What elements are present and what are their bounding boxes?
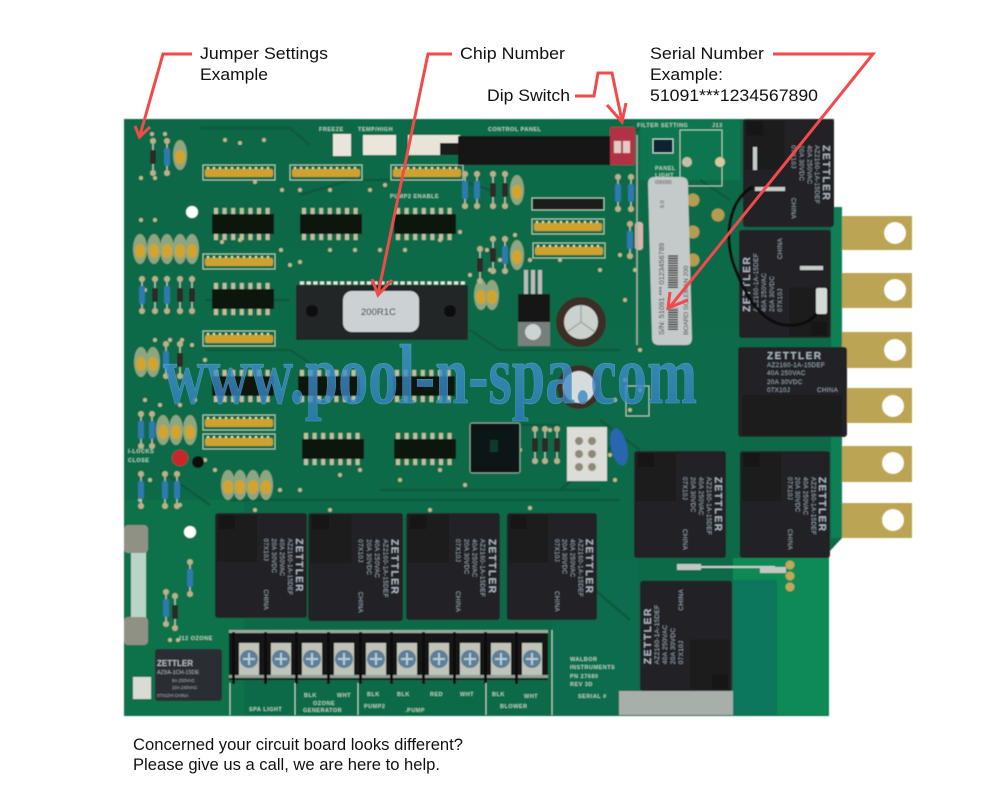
relay bottom 2: 07X10J (357, 539, 364, 563)
discrete resistors and diodes (138, 138, 634, 631)
arrow: jumper settings (135, 54, 192, 137)
gold pads by relay (786, 565, 794, 587)
serial number sticker: 6.0 (660, 200, 666, 208)
label: serial number: Serial Number (650, 44, 764, 63)
silkscreen labels: BLK (367, 692, 380, 698)
relay horizontal: 07X10J (767, 387, 790, 394)
silkscreen labels: GENERATOR (303, 708, 342, 714)
ozone relay (155, 649, 222, 701)
relay second right (739, 230, 831, 338)
relay middle left: 20A 30VDC (689, 477, 696, 513)
relay bottom 4: CHINA (553, 591, 560, 613)
label: serial number (650, 44, 818, 105)
silkscreen labels: FILTER SETTING (637, 123, 688, 129)
relay bottom 3: ZETTLER (486, 539, 497, 594)
silkscreen labels: CONTROL PANEL (488, 127, 541, 133)
resistor packs (203, 165, 605, 449)
horizontal glass fuse near relays (677, 564, 786, 573)
relay bottom 4: 40A 250VAC (569, 539, 575, 578)
relay bottom 3: 07X10J (454, 539, 461, 562)
arrow: serial number (668, 54, 873, 308)
relay horizontal: ZETTLER (767, 351, 822, 362)
control panel ribbon header (458, 136, 610, 165)
relay middle right: 07X10J (786, 477, 793, 500)
relay middle right: ZETTLER (816, 477, 827, 532)
relay horizontal (738, 347, 847, 437)
label: serial number: Example: (650, 65, 723, 84)
relay lower: 40A 250VAC (662, 624, 669, 664)
relay second right: 07X10J (777, 288, 784, 312)
relay bottom 2: 20A 30VDC (365, 539, 372, 575)
relay top right: 20A 30VDC (797, 145, 804, 181)
relay second right: ZETTLER (742, 256, 753, 312)
relay horizontal: 40A 250VAC (767, 370, 806, 377)
silkscreen labels: CLOSE (128, 458, 149, 464)
silkscreen labels: BLOWER (500, 704, 527, 710)
silkscreen labels: PUMP2 (364, 704, 385, 710)
silkscreen labels: LIGHT (655, 173, 674, 179)
panel: circuit board photograph (124, 119, 912, 716)
silkscreen labels: INSTRUMENTS (570, 665, 615, 671)
relay bottom 4 (507, 513, 597, 620)
silkscreen labels: J12 OZONE (178, 636, 213, 642)
relay bottom 4: ZETTLER (583, 539, 594, 594)
relay top right: CHINA (789, 198, 796, 220)
silkscreen labels (128, 123, 723, 715)
ozone relay: 8A 250VAC (172, 678, 196, 683)
copper traces (160, 128, 730, 620)
board outline (124, 119, 842, 716)
label: dip switch: Dip Switch (487, 86, 570, 105)
silkscreen labels: BLK (397, 692, 410, 698)
metal tab on top relay (755, 147, 823, 268)
relay second right: 40A 250VAC (761, 273, 768, 312)
relay middle left: ZETTLER (712, 477, 723, 532)
relay bottom 2: AZ2160-1A-15DEF (381, 539, 388, 598)
label: jumper settings: Jumper Settings (200, 44, 328, 63)
blue capacitor (607, 427, 631, 467)
relay bottom 1 (215, 513, 307, 618)
relay top right: ZETTLER (820, 145, 831, 201)
silkscreen labels: I-LOCKS (128, 449, 154, 455)
relay lower: AZ2160-1A-15DEF (654, 605, 661, 664)
brass terminal lugs with mounting holes (840, 216, 912, 538)
relay middle right: AZ2160-1A-15DEF (809, 477, 816, 535)
LED and transistor (172, 450, 204, 468)
relay second right: 20A 30VDC (769, 276, 776, 312)
relay bottom 3: CHINA (454, 591, 461, 613)
arrow: chip number (372, 54, 452, 295)
label: jumper settings: Example (200, 65, 268, 84)
large square chip (470, 423, 520, 473)
relay bottom 1: CHINA (262, 589, 269, 611)
logic ICs (212, 211, 456, 462)
relay bottom 3: AZ2160-1A-15DEF (479, 539, 486, 597)
relay bottom 1: 07X10J (262, 538, 269, 561)
solder ring terminals (693, 200, 718, 260)
arrow: dip switch (575, 73, 626, 122)
silkscreen labels: PUMP2 ENABLE (390, 194, 439, 200)
capacitors (133, 140, 524, 500)
relay middle right: 20A 30VDC (794, 477, 801, 513)
label: serial number: 51091***1234567890 (650, 86, 818, 105)
relay lower: CHINA (678, 589, 685, 611)
relay top right: 07X10J (789, 145, 796, 169)
relay lower: 20A 30VDC (670, 628, 677, 664)
voltage regulator (518, 270, 550, 346)
relay middle left: 07X10J (681, 477, 688, 500)
silkscreen labels: RED (430, 692, 443, 698)
fuse (124, 525, 148, 645)
relay bottom 4: 20A 30VDC (561, 539, 568, 575)
serial number sticker: S/N: 51091 *** 0123456789 (657, 243, 666, 335)
relay bottom 2: CHINA (357, 592, 364, 613)
relay bottom 4: 07X10J (553, 539, 560, 562)
ozone relay: 07X10H CHINA (157, 693, 189, 698)
silkscreen labels: WHT (460, 692, 474, 698)
dip switch (610, 127, 635, 165)
relay bottom 3: 20A 30VDC (462, 539, 469, 575)
silkscreen labels: PN 27680 (570, 674, 598, 680)
silkscreen labels: WHT (337, 693, 351, 699)
relay top right: AZ2160-1A-15DEF (813, 145, 820, 204)
relay horizontal: CHINA (817, 387, 839, 394)
relay bottom 1: AZ2160-1A-15DEF (286, 538, 293, 595)
footer note: Concerned your circuit board looks different? (133, 735, 463, 754)
six pin connector (567, 427, 607, 481)
relay middle right (740, 451, 830, 558)
relay bottom 2 (308, 513, 403, 621)
serial number sticker: 000000 (655, 180, 672, 186)
second capacitor (557, 365, 601, 409)
relay middle right: 40A 250VAC (802, 477, 808, 516)
relay middle left: 40A 250VAC (697, 477, 704, 516)
silkscreen labels: REV 3D (570, 682, 593, 688)
relay bottom 4: AZ2160-1A-15DEF (576, 539, 583, 597)
footer note: Please give us a call, we are here to help. (133, 755, 440, 774)
silkscreen labels: SERIAL # (578, 694, 607, 700)
silkscreen labels: .PUMP (405, 708, 425, 714)
solder pads (140, 134, 640, 640)
small bead resistor (635, 222, 643, 250)
relay bottom 1: ZETTLER (293, 538, 304, 593)
small square jumper (626, 386, 649, 416)
relay second right: CHINA (777, 237, 784, 259)
board colour zones (124, 119, 842, 716)
label: jumper settings (200, 44, 328, 84)
silkscreen labels: BLK (492, 692, 505, 698)
relay middle left (634, 451, 726, 558)
white wire link (636, 135, 638, 345)
relay second right: AZ2160-1A-15DEF (753, 253, 760, 312)
two pin white connector (133, 677, 151, 699)
silkscreen labels: SPA LIGHT (249, 707, 282, 713)
relay bottom 3 (406, 513, 500, 620)
relay middle left: AZ2160-1A-15DEF (705, 477, 712, 535)
ozone relay: ZETTLER (157, 659, 193, 668)
silkscreen labels: WALBOR (570, 657, 597, 663)
silkscreen labels: PANEL (655, 166, 676, 172)
screw terminal block (229, 630, 548, 684)
silkscreen labels: TEMP/HIGH (358, 127, 393, 133)
relay top right: 40A 250VAC (805, 145, 812, 184)
relay top right (743, 119, 834, 227)
silkscreen labels: OZONE (313, 701, 335, 707)
white connectors (333, 134, 470, 156)
relay bottom 1: 20A 30VDC (270, 538, 277, 574)
large capacitor (556, 297, 606, 347)
relay bottom 1: 40A 250VAC (278, 538, 285, 576)
mounting holes (190, 212, 192, 532)
microcontroller chip: 200R1C (361, 307, 396, 318)
label: chip number: Chip Number (460, 44, 565, 63)
silkscreen labels: J13 (712, 123, 723, 129)
serial number sticker (648, 177, 692, 345)
microcontroller chip (296, 283, 468, 340)
watermark: website address: www.pool-n-spa.com (163, 328, 697, 422)
inline glass fuse (816, 288, 827, 314)
panel light jack (653, 130, 725, 186)
relay bottom 2: 40A 250VAC (373, 539, 380, 578)
ozone relay: AZ8A-1CH-15DE (157, 670, 200, 676)
relay bottom 2: ZETTLER (389, 539, 400, 595)
black wire loop (729, 187, 823, 325)
relay lower (640, 581, 732, 691)
serial number sticker: BOARD SOLEMAN 200 (683, 265, 690, 335)
footer note (133, 735, 463, 774)
relay horizontal: 20A 30VDC (767, 379, 803, 386)
silkscreen labels: WHT (524, 694, 538, 700)
relay middle left: CHINA (681, 529, 688, 551)
relay horizontal: AZ2160-1A-15DEF (767, 362, 825, 369)
relay bottom 3: 40A 250VAC (470, 539, 478, 578)
silkscreen labels: BLK (304, 693, 317, 699)
silkscreen labels: FREEZE (319, 127, 344, 133)
ozone relay: 10A 240VAC (172, 685, 198, 690)
relay lower: 07X10J (678, 640, 685, 664)
relay middle right: CHINA (786, 529, 793, 551)
relay lower: ZETTLER (643, 607, 654, 664)
